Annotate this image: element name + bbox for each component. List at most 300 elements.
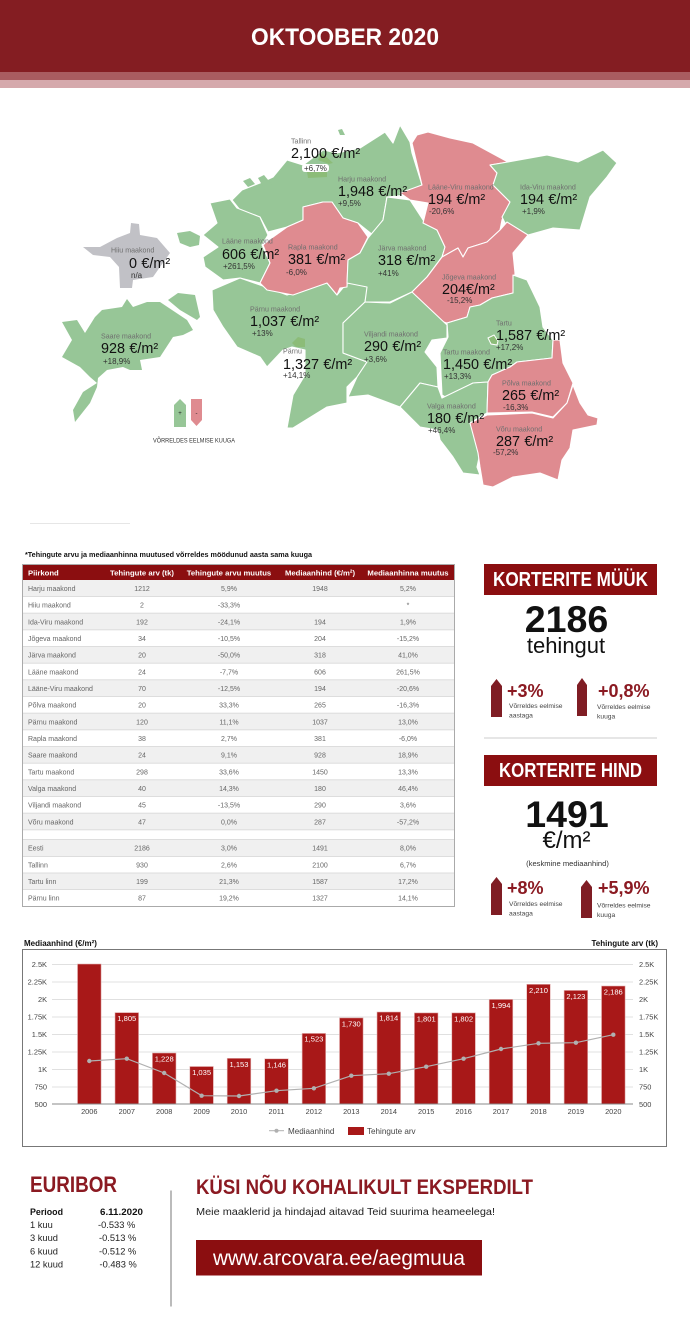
- table rows: Tallinn: [28, 862, 48, 869]
- label: Tartu maakond: 1,450 €/m²: [443, 357, 512, 373]
- table rows: 40: [138, 786, 146, 793]
- table rows: 2100: [312, 862, 328, 869]
- label: Järva maakond: +41%: [378, 269, 399, 278]
- median price line: [87, 1032, 616, 1098]
- stat: +8%: Võrreldes eelmise: [509, 901, 563, 908]
- right axis: 1.25K: [639, 1048, 658, 1056]
- table rows: 33,6%: [219, 769, 239, 776]
- label: Põlva maakond: Põlva maakond: [502, 380, 551, 388]
- left axis: 2.25K: [28, 978, 47, 986]
- stat: +0,8%: Võrreldes eelmise: [597, 704, 651, 711]
- table rows: 34: [138, 636, 146, 643]
- table rows: 318: [314, 653, 326, 660]
- table rows: 290: [314, 803, 326, 810]
- label: Tartu: Tartu: [496, 320, 512, 328]
- table rows: 18,9%: [398, 753, 418, 760]
- map legend: -: [196, 411, 198, 417]
- region: Viljandi maakond: [343, 292, 447, 407]
- table rows: Lääne-Viru maakond: [28, 686, 93, 693]
- left axis: 750: [35, 1082, 47, 1092]
- label: Harju maakond: Harju maakond: [338, 176, 386, 184]
- map of Estonia: [62, 125, 617, 487]
- x axis years: 2007: [119, 1107, 135, 1116]
- label: Rapla maakond: -6,0%: [286, 268, 307, 277]
- label: Harju maakond: 1,948 €/m²: [338, 184, 407, 200]
- stat: +5,9%: kuuga: [597, 912, 616, 919]
- table rows: 14,1%: [398, 895, 418, 902]
- table rows: 1,9%: [400, 619, 416, 626]
- table rows: Lääne maakond: [28, 669, 78, 676]
- stat: +5,9%: [597, 878, 651, 919]
- x axis years: 2012: [306, 1107, 322, 1116]
- stat: +3%: Võrreldes eelmise: [509, 703, 563, 710]
- label: Pärnu maakond: Pärnu maakond: [250, 306, 300, 314]
- table rows: 6,7%: [400, 862, 416, 869]
- table rows: Tartu linn: [28, 879, 57, 886]
- table rows: Pärnu maakond: [28, 719, 78, 726]
- region: Saare maakond: [62, 293, 200, 422]
- table rows: Harju maakond: [28, 586, 76, 593]
- label: Tartu: +17,2%: [496, 343, 523, 352]
- icon: up arrow, year change: [491, 877, 502, 915]
- table rows: 14,3%: [219, 786, 239, 793]
- label: Järva maakond: 318 €/m²: [378, 253, 435, 269]
- table rows: 17,2%: [398, 879, 418, 886]
- label: Lääne maakond: +261,5%: [223, 262, 255, 271]
- table rows: -57,2%: [397, 819, 419, 826]
- stat: +0,8%: kuuga: [597, 714, 616, 720]
- table rows: [23, 580, 454, 902]
- label: Harju maakond: +9,5%: [338, 199, 361, 208]
- title: OKTOOBER 2020: [251, 24, 439, 51]
- website button: www.arcovara.ee/aegmuua: [212, 1247, 465, 1270]
- table rows: 194: [314, 686, 326, 693]
- table rows: 70: [138, 686, 146, 693]
- label: Viljandi maakond: [364, 330, 421, 364]
- table rows: 1327: [312, 895, 328, 902]
- left axis: 1.75K: [28, 1012, 47, 1022]
- chart legend: Mediaanhind: [288, 1127, 334, 1136]
- region: Tartu maakond: [440, 275, 553, 398]
- bar value labels: 2,123: [566, 992, 585, 1001]
- left axis: 1K: [38, 1065, 47, 1074]
- label: Põlva maakond: [502, 380, 559, 412]
- table rows: -13,5%: [218, 803, 240, 810]
- table rows: 3,6%: [400, 803, 416, 810]
- right axis: 2K: [639, 995, 648, 1004]
- stat: +0,8%: [597, 681, 651, 720]
- table rows: 1037: [312, 719, 328, 726]
- table header: Piirkond: [28, 568, 59, 578]
- table rows: 24: [138, 669, 146, 676]
- table rows: 204: [314, 636, 326, 643]
- table rows: 87: [138, 895, 146, 902]
- region: Põlva maakond: [487, 340, 573, 417]
- right axis: 1.75K: [639, 1012, 658, 1022]
- table rows: 606: [314, 669, 326, 676]
- table rows: Viljandi maakond: [28, 803, 81, 810]
- table rows: -7,7%: [220, 669, 238, 676]
- table rows: -33,3%: [218, 603, 240, 610]
- label: Tartu: [496, 320, 565, 352]
- label: Tallinn: +6,7%: [304, 164, 327, 173]
- table rows: 46,4%: [398, 786, 418, 793]
- label: Jõgeva maakond: Jõgeva maakond: [442, 274, 496, 282]
- x axis years: 2018: [530, 1107, 547, 1116]
- heading: korterite müük: KORTERITE MÜÜK: [493, 568, 648, 591]
- label: Saare maakond: +18,9%: [103, 357, 130, 366]
- table rows: Võru maakond: [28, 819, 74, 826]
- label: Pärnu: 1,327 €/m²: [283, 357, 352, 373]
- label: Valga maakond: [427, 402, 484, 435]
- bar value labels: 1,814: [379, 1014, 398, 1022]
- euribor rates: 6 kuud: [30, 1246, 58, 1256]
- table rows: 5,2%: [400, 586, 416, 593]
- label: Lääne maakond: [222, 238, 279, 271]
- x axis years: 2013: [343, 1107, 360, 1116]
- label: Lääne-Viru maakond: [428, 184, 494, 216]
- label: Pärnu maakond: 1,037 €/m²: [250, 314, 319, 330]
- table rows: 199: [136, 879, 148, 886]
- table rows: 192: [136, 619, 148, 626]
- panel: korterite hind: [484, 755, 657, 919]
- table rows: 381: [314, 736, 326, 743]
- stat: +5,9%: Võrreldes eelmise: [597, 902, 651, 910]
- x axis years: 2019: [568, 1107, 584, 1116]
- x axis years: 2020: [605, 1107, 622, 1116]
- stat: 1491 €/m²: [525, 793, 609, 854]
- left axis: [28, 960, 47, 1109]
- table rows: Rapla maakond: [28, 736, 77, 743]
- label: Lääne maakond: 606 €/m²: [222, 247, 279, 263]
- x axis years: 2011: [269, 1107, 284, 1116]
- table rows: 24: [138, 753, 146, 760]
- table rows: 194: [314, 619, 326, 626]
- bar value labels: [117, 986, 623, 1077]
- header banner: [0, 0, 690, 88]
- label: Ida-Viru maakond: +1,9%: [522, 207, 545, 216]
- table rows: 2186: [134, 846, 150, 853]
- bar value labels: 1,228: [155, 1054, 174, 1064]
- region: Järva maakond: [347, 197, 445, 302]
- table rows: 13,0%: [398, 719, 418, 726]
- euribor rates: Periood: [30, 1207, 63, 1217]
- right axis: 750: [639, 1082, 651, 1092]
- label: Jõgeva maakond: -15,2%: [447, 296, 472, 305]
- table rows: 2,6%: [221, 862, 237, 869]
- label: Rapla maakond: Rapla maakond: [288, 244, 338, 252]
- label: Tartu maakond: [443, 348, 512, 381]
- heading: korterite müük: [484, 564, 657, 595]
- left axis: 500: [35, 1100, 47, 1109]
- label: Tartu: 1,587 €/m²: [496, 328, 565, 344]
- stat: +5,9%: +5,9%: [598, 878, 650, 898]
- stat: 2186 tehingut: 2186: [525, 598, 608, 640]
- x axis years: 2010: [231, 1107, 247, 1116]
- label: Tartu maakond: Tartu maakond: [443, 348, 490, 356]
- table rows: 2,7%: [221, 736, 237, 743]
- right axis: [639, 960, 658, 1109]
- region: Jõgeva maakond: [410, 222, 528, 323]
- table rows: 1491: [312, 846, 328, 853]
- label: Viljandi maakond: 290 €/m²: [364, 339, 421, 355]
- label: Järva maakond: [378, 244, 435, 278]
- label: Saare maakond: 928 €/m²: [101, 341, 158, 357]
- region: Lääne maakond: [203, 199, 270, 283]
- table rows: -20,6%: [397, 686, 419, 693]
- left axis: 2.5K: [32, 960, 47, 969]
- label: Võru maakond: [493, 426, 553, 457]
- table header: [23, 565, 454, 580]
- table rows: Saare maakond: [28, 753, 78, 760]
- stat: +8%: +8%: [507, 878, 544, 898]
- label: Võru maakond: Võru maakond: [496, 426, 542, 434]
- table rows: 287: [314, 819, 326, 826]
- bars: [78, 964, 625, 1104]
- label: Harju maakond: [338, 176, 407, 208]
- label: Valga maakond: 180 €/m²: [427, 411, 484, 427]
- label: Tallinn: [291, 138, 360, 173]
- table rows: 2: [140, 603, 144, 610]
- left axis: 1.25K: [28, 1048, 47, 1056]
- euribor rates: -0.533 %: [98, 1220, 135, 1230]
- table rows: 9,1%: [221, 753, 237, 760]
- table rows: *: [407, 603, 410, 610]
- stat: +0,8%: +0,8%: [598, 681, 650, 701]
- stat: 1491 €/m²: €/m²: [542, 827, 591, 854]
- label: Lääne-Viru maakond: -20,6%: [429, 207, 454, 216]
- region: Võru maakond: [470, 385, 598, 487]
- label: Rapla maakond: [286, 244, 345, 277]
- combo chart: [22, 950, 666, 1146]
- euribor rates: -0.483 %: [100, 1260, 137, 1270]
- label: Pärnu: +14,1%: [283, 371, 310, 380]
- stat: +3%: [507, 681, 563, 720]
- x axis years: 2014: [381, 1107, 397, 1116]
- stat: 2186 tehingut: tehingut: [527, 633, 605, 658]
- table rows: -6,0%: [399, 736, 417, 743]
- left axis: 2K: [38, 995, 47, 1004]
- table rows: -50,0%: [218, 653, 240, 660]
- heading: korterite hind: [484, 755, 657, 786]
- label: Jõgeva maakond: 204€/m²: [442, 282, 495, 298]
- x axis years: 2015: [418, 1107, 434, 1116]
- label: Ida-Viru maakond: 194 €/m²: [520, 192, 577, 208]
- chart titles: [24, 939, 658, 948]
- text block: Meie maaklerid ja hindajad aitavad Teid suurima heameelega!: [196, 1207, 495, 1218]
- bar value labels: 1,146: [267, 1060, 286, 1070]
- bar value labels: 1,802: [454, 1014, 473, 1024]
- region: Hiiu maakond: [83, 223, 200, 288]
- region: Valga maakond: [400, 382, 488, 475]
- right axis: 1.5K: [639, 1030, 654, 1039]
- table rows: Eesti: [28, 846, 44, 853]
- table rows: 180: [314, 786, 326, 793]
- table rows: Hiiu maakond: [28, 603, 71, 610]
- chart titles: Tehingute arv (tk): [591, 939, 658, 948]
- table header: Mediaanhinna muutus: [367, 568, 449, 578]
- bar value labels: 1,994: [491, 1001, 511, 1010]
- stat: 1491 €/m²: 1491: [525, 793, 609, 835]
- region: Harju maakond: [232, 125, 422, 235]
- table rows: 38: [138, 736, 146, 743]
- region: Lääne-Viru maakond: [400, 132, 510, 257]
- table rows: 19,2%: [219, 895, 239, 902]
- table rows: 1587: [312, 879, 328, 886]
- table rows: 1212: [134, 586, 150, 593]
- right axis: 2.5K: [639, 960, 654, 969]
- table rows: 21,3%: [219, 879, 239, 886]
- label: Põlva maakond: -16,3%: [503, 403, 528, 412]
- map legend: +: [178, 411, 182, 417]
- table header: Tehingute arv (tk): [110, 568, 174, 578]
- table rows: Valga maakond: [28, 786, 76, 793]
- table rows: 13,3%: [398, 769, 418, 776]
- label: Jõgeva maakond: [442, 274, 496, 305]
- right axis: 1K: [639, 1065, 648, 1074]
- stat: +3%: +3%: [507, 681, 544, 701]
- city: Pärnu: [292, 337, 305, 347]
- x axis years: 2008: [156, 1107, 172, 1116]
- table rows: -12,5%: [218, 686, 240, 693]
- table header: Mediaanhind (€/m²): [285, 568, 355, 578]
- label: Ida-Viru maakond: Ida-Viru maakond: [520, 184, 576, 192]
- table rows: -24,1%: [218, 619, 240, 626]
- label: Tartu maakond: +13,3%: [444, 372, 471, 381]
- bar value labels: 1,801: [417, 1014, 436, 1024]
- bar value labels: 1,805: [117, 1014, 136, 1023]
- region: Rapla maakond: [260, 202, 368, 295]
- table rows: -15,2%: [397, 636, 419, 643]
- table rows: -16,3%: [397, 703, 419, 710]
- icon: up arrow, month change: [581, 880, 592, 918]
- table rows: 8,0%: [400, 846, 416, 853]
- euribor rates: [30, 1207, 143, 1270]
- table rows: Pärnu linn: [28, 895, 60, 902]
- label: Valga maakond: Valga maakond: [427, 402, 476, 410]
- label: Valga maakond: +46,4%: [428, 426, 455, 435]
- label: Saare maakond: Saare maakond: [101, 332, 151, 340]
- label: Lääne-Viru maakond: 194 €/m²: [428, 192, 485, 208]
- table rows: -10,5%: [218, 636, 240, 643]
- table rows: Põlva maakond: [28, 703, 76, 710]
- table rows: 5,9%: [221, 586, 237, 593]
- table rows: 930: [136, 862, 148, 869]
- heading: euribor: EURIBOR: [30, 1172, 117, 1197]
- city: Tartu: [488, 335, 498, 345]
- stat: +8%: aastaga: [509, 910, 533, 918]
- table rows: Järva maakond: [28, 653, 76, 660]
- bar value labels: 1,153: [229, 1060, 249, 1069]
- table rows: Jõgeva maakond: [28, 636, 81, 643]
- heading: korterite hind: KORTERITE HIND: [499, 760, 642, 782]
- bar value labels: 1,523: [304, 1034, 323, 1044]
- chart titles: Mediaanhind (€/m²): [24, 939, 97, 948]
- label: Tallinn: 2,100 €/m²: [291, 146, 360, 162]
- table rows: 11,1%: [219, 719, 239, 726]
- label: Võru maakond: 287 €/m²: [496, 434, 553, 450]
- bar value labels: 1,035: [192, 1068, 211, 1077]
- x axis years: 2017: [493, 1107, 509, 1116]
- label: Ida-Viru maakond: [520, 184, 577, 216]
- table rows: 1948: [312, 586, 328, 593]
- stat: +3%: aastaga: [509, 712, 533, 720]
- bar value labels: 1,730: [342, 1020, 361, 1028]
- label: Lääne-Viru maakond: Lääne-Viru maakond: [428, 184, 494, 192]
- table note: *Tehingute arvu ja mediaanhinna muutused võrreldes möödunud aasta sama kuuga: [25, 550, 313, 559]
- euribor rates: -0.512 %: [99, 1246, 136, 1256]
- label: Põlva maakond: 265 €/m²: [502, 388, 559, 404]
- table rows: Ida-Viru maakond: [28, 619, 83, 626]
- label: Pärnu maakond: [250, 306, 319, 338]
- caption: (keskmine mediaanhind): [526, 859, 609, 868]
- label: Hiiu maakond: Hiiu maakond: [111, 246, 154, 254]
- heading: call to action: KÜSI NÕU KOHALIKULT EKSPERDILT: [196, 1175, 533, 1199]
- label: Viljandi maakond: +3,6%: [364, 355, 387, 364]
- label: Järva maakond: Järva maakond: [378, 244, 427, 252]
- table rows: Tartu maakond: [28, 769, 74, 776]
- table rows: 20: [138, 703, 146, 710]
- label: Lääne maakond: Lääne maakond: [222, 238, 273, 246]
- euribor rates: -0.513 %: [99, 1233, 136, 1243]
- map legend: [153, 399, 235, 444]
- table rows: 47: [138, 819, 146, 826]
- table rows: 20: [138, 653, 146, 660]
- chart legend: Tehingute arv: [367, 1127, 417, 1136]
- region: Pärnu maakond: [212, 278, 368, 428]
- euribor rates: 6.11.2020: [100, 1207, 143, 1217]
- label: Pärnu: Pärnu: [283, 348, 302, 356]
- label: Hiiu maakond: 0 €/m²: [129, 256, 170, 272]
- label: Viljandi maakond: Viljandi maakond: [364, 330, 418, 338]
- label: Rapla maakond: 381 €/m²: [288, 252, 345, 268]
- x axis years: 2016: [455, 1107, 472, 1116]
- right axis: 500: [639, 1100, 651, 1109]
- table rows: 261,5%: [396, 669, 420, 676]
- table rows: 928: [314, 753, 326, 760]
- city: Tallinn: [302, 153, 333, 178]
- table rows: 33,3%: [219, 703, 239, 710]
- label: Saare maakond: [101, 332, 158, 366]
- chart legend: [269, 1127, 417, 1136]
- icon: up arrow, month change: [577, 678, 587, 716]
- table rows: 265: [314, 703, 326, 710]
- euribor rates: 3 kuud: [30, 1233, 58, 1243]
- right axis: 2.25K: [639, 978, 658, 986]
- x axis years: 2006: [81, 1107, 98, 1116]
- bar value labels: 2,186: [604, 988, 623, 996]
- label: Pärnu maakond: +13%: [252, 329, 273, 338]
- panel: contact call to action: [196, 1175, 533, 1276]
- table rows: 298: [136, 769, 148, 776]
- map legend: VÕRRELDES EELMISE KUUGA: [153, 438, 235, 444]
- x axis years: 2009: [193, 1107, 210, 1116]
- label: Hiiu maakond: [111, 246, 170, 280]
- panel: korterite müük: [484, 564, 657, 720]
- x axis years: [81, 1107, 622, 1116]
- euribor rates: 12 kuud: [30, 1260, 63, 1270]
- stat: +8%: [507, 878, 563, 918]
- euribor rates: 1 kuu: [30, 1220, 53, 1230]
- table header: Tehingute arvu muutus: [187, 568, 271, 578]
- table rows: 41,0%: [398, 653, 418, 660]
- table rows: 120: [136, 719, 148, 726]
- bar value labels: 2,210: [529, 986, 548, 995]
- region: Ida-Viru maakond: [490, 150, 617, 235]
- label: Hiiu maakond: n/a: [131, 271, 143, 280]
- table rows: 3,0%: [221, 846, 237, 853]
- label: Pärnu: [283, 348, 352, 380]
